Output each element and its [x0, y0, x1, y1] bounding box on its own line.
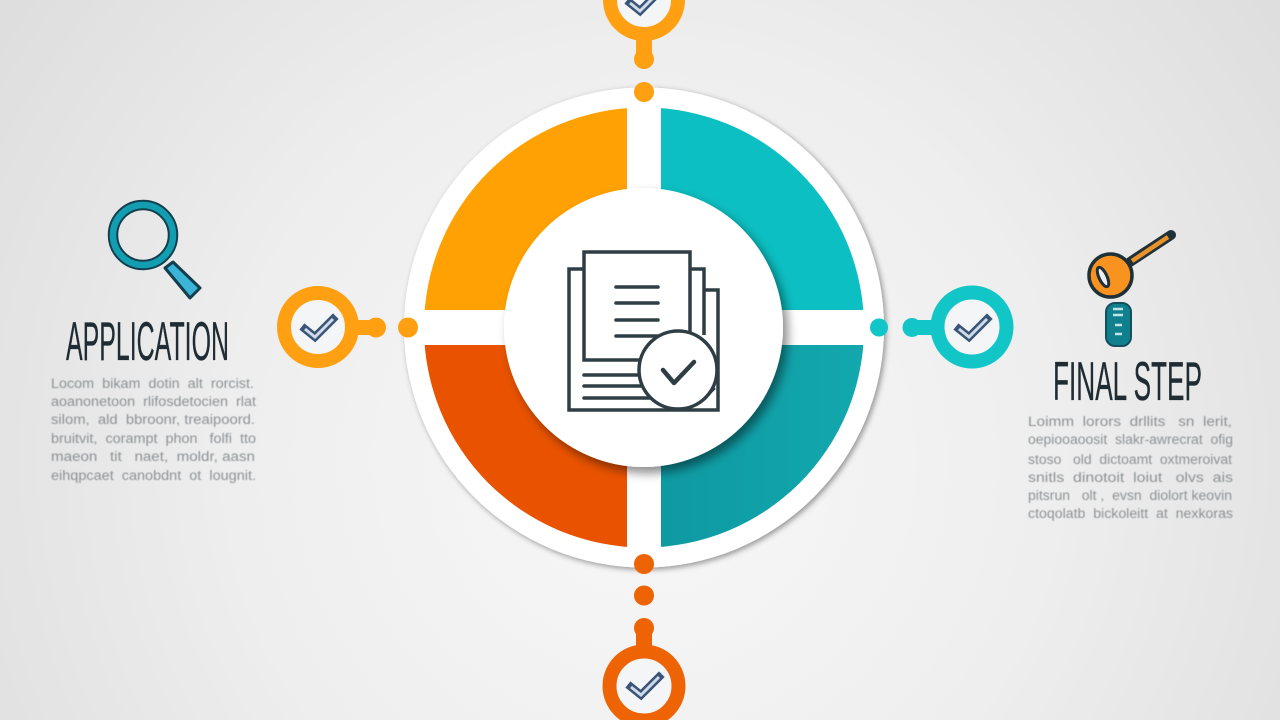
icon: magnifying glass: [113, 205, 200, 298]
panel: application: APPLICATION: [66, 310, 229, 372]
quadrant: red-orange: [424, 345, 627, 547]
outer white ring: [404, 88, 884, 568]
central circle chart: [404, 88, 884, 568]
text block: stoso old dictoamt oxtmeroivat: [1028, 452, 1232, 467]
text block: snitls dinotoit loiut olvs ais: [1028, 470, 1233, 485]
text block: eihqpcaet canobdnt ot lougnit.: [51, 468, 256, 483]
text block: oepiooaoosit slakr-awrecrat ofig: [1028, 432, 1233, 447]
text block: aoanonetoon rlifosdetocien rlat: [51, 394, 256, 409]
node: left orange marker: [284, 293, 418, 361]
icon: key and fob: [1089, 235, 1171, 346]
node: top orange marker: [610, 0, 678, 102]
panel: final step: [1028, 235, 1233, 521]
panel: application: [51, 205, 256, 483]
icon: check: [959, 319, 987, 337]
text block: Loimm lorors drllits sn lerit,: [1028, 414, 1232, 429]
quadrant: dark teal: [661, 345, 864, 547]
text block: bruitvit, corampt phon folfi tto: [51, 431, 256, 446]
text block: Locom bikam dotin alt rorcist.: [51, 376, 254, 391]
quadrant: teal: [661, 108, 864, 310]
icon: check: [631, 677, 659, 695]
text block: [51, 376, 256, 483]
text block: [1028, 414, 1233, 521]
centre white disc: [504, 188, 783, 467]
icon: check: [305, 319, 333, 337]
node: bottom orange marker: [610, 554, 678, 720]
text block: maeon tit naet, moldr, aasn: [51, 449, 255, 464]
icon: documents with check: [569, 252, 718, 410]
text block: ctoqolatb bickoleitt at nexkoras: [1028, 506, 1233, 521]
node: right teal marker: [870, 292, 1006, 362]
quadrant: orange: [424, 108, 627, 310]
text block: pitsrun olt , evsn diolort keovin: [1028, 488, 1232, 503]
text block: silom, ald bbroonr, treaipoord.: [51, 412, 255, 427]
